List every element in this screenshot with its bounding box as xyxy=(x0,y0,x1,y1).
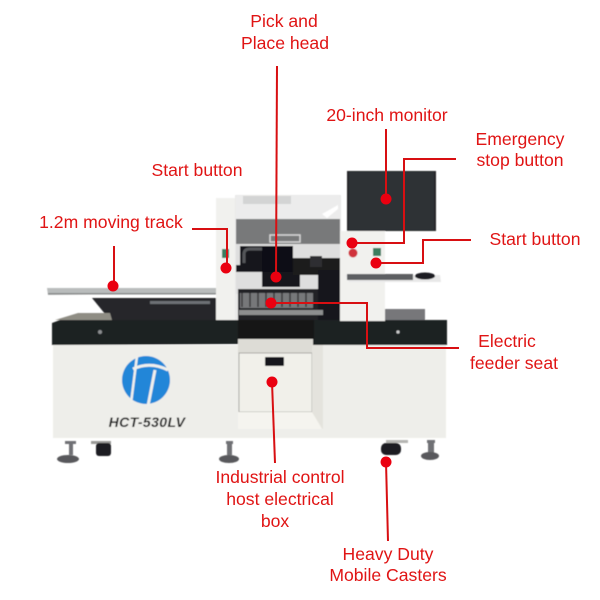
label: industrial control host electrical box: box xyxy=(261,511,289,531)
label: emergency stop button xyxy=(346,129,565,248)
black worktop band xyxy=(52,320,447,345)
label: electric feeder seat: Electric xyxy=(478,331,536,351)
label: heavy duty mobile casters: Mobile Casters xyxy=(329,565,447,585)
label: moving track xyxy=(39,212,183,292)
label: emergency stop button: Emergency xyxy=(476,129,565,149)
start button right xyxy=(373,248,381,256)
lower cabinet xyxy=(53,345,446,438)
casters xyxy=(91,440,408,456)
feet xyxy=(57,440,439,463)
right white column xyxy=(340,231,385,321)
moving track xyxy=(47,288,216,320)
machine photo illustration xyxy=(47,171,447,463)
placement head xyxy=(236,246,340,320)
logo xyxy=(122,356,170,406)
left white column xyxy=(216,198,236,320)
label: heavy duty mobile casters: Heavy Duty xyxy=(343,544,434,564)
label: start button right: Start button xyxy=(490,229,580,249)
label: electric feeder seat xyxy=(266,298,558,373)
label: moving track: 1.2m moving track xyxy=(39,212,183,232)
label: industrial control host electrical box: host electrical xyxy=(226,489,334,509)
keyboard tray xyxy=(345,272,441,282)
start button left xyxy=(222,249,229,258)
label: pick and place head xyxy=(241,11,329,282)
label: 20-inch monitor xyxy=(326,105,448,204)
label: pick and place head: Pick and xyxy=(250,11,318,31)
label: start button right xyxy=(370,229,580,268)
label: heavy duty mobile casters xyxy=(329,456,447,585)
label: industrial control host electrical box xyxy=(215,376,345,531)
right rear track xyxy=(385,309,425,320)
model name: HCT-530LV xyxy=(109,414,187,430)
emergency stop button xyxy=(348,248,358,258)
gantry chamber xyxy=(235,195,341,320)
label: 20-inch monitor: 20-inch monitor xyxy=(326,105,448,125)
label: start button left: Start button xyxy=(152,160,242,180)
electrical box opening xyxy=(238,339,323,429)
monitor xyxy=(347,171,436,231)
label: emergency stop button: stop button xyxy=(476,150,564,170)
feeder seat xyxy=(238,289,323,320)
label: electric feeder seat: feeder seat xyxy=(470,353,558,373)
label: start button left xyxy=(152,160,242,274)
label: industrial control host electrical box: Industrial control xyxy=(215,467,345,487)
label: pick and place head: Place head xyxy=(241,33,329,53)
